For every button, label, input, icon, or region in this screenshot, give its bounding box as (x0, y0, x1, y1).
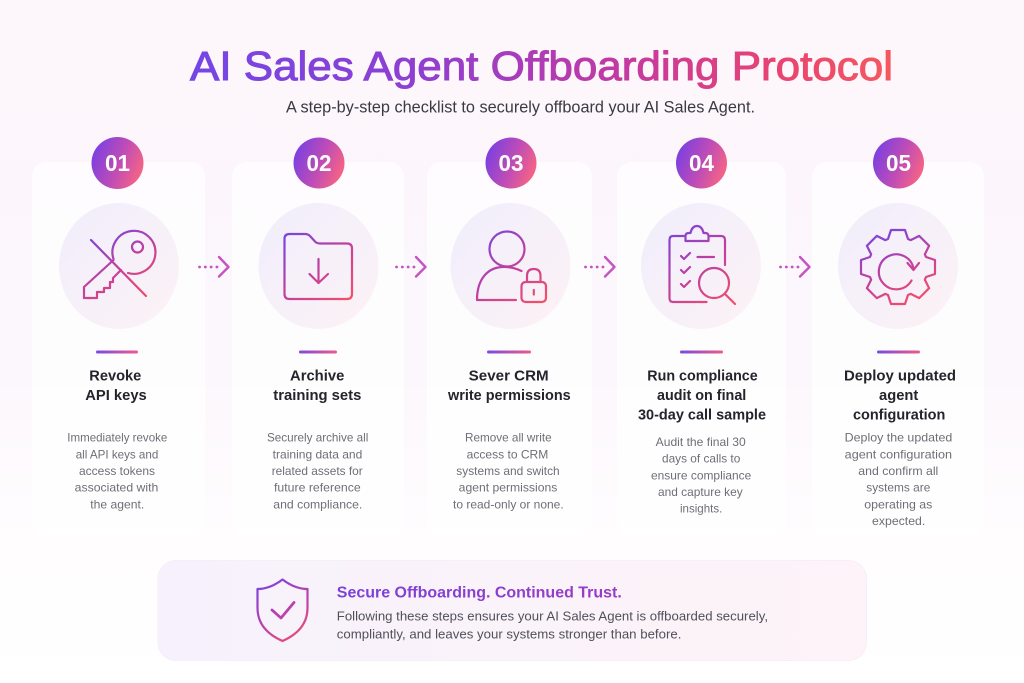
step description: and confirm all (858, 464, 938, 478)
step description: associated with (75, 481, 158, 495)
number badge 03 (486, 138, 536, 188)
accent bar (299, 350, 337, 354)
step description: training data and (273, 447, 362, 461)
number badge 02 (294, 138, 344, 188)
title: AI Sales Agent Offboarding Protocol (190, 43, 893, 89)
card background (812, 162, 984, 537)
step description: systems and switch (456, 464, 560, 478)
number badge 03: 03 (498, 150, 524, 176)
card background (427, 162, 592, 537)
accent bar (487, 350, 531, 354)
arrow 1 to 2 (200, 257, 228, 276)
step description: Immediately revoke (67, 431, 168, 445)
icon: revoked key (84, 231, 155, 298)
step title: audit on final (657, 387, 746, 404)
step description: agent configuration (845, 447, 952, 461)
step title: Run compliance (647, 368, 758, 385)
step title: Deploy updated (844, 368, 956, 385)
step description (651, 435, 752, 516)
step description: agent permissions (459, 481, 557, 495)
accent bar (680, 350, 723, 354)
card background (32, 162, 205, 537)
step description: Deploy the updated (845, 431, 952, 445)
step description: expected. (872, 514, 925, 528)
step title (447, 368, 571, 404)
arrow 4 to 5 (780, 257, 810, 276)
arrow 3 to 4 (586, 257, 614, 276)
accent bar (96, 350, 138, 354)
callout background (158, 560, 866, 660)
panel: step 1 (32, 137, 205, 537)
icon circle (450, 203, 570, 329)
step title: write permissions (447, 387, 571, 404)
step title: Revoke (89, 368, 141, 385)
step description: Remove all write (465, 431, 552, 445)
step description: access tokens (79, 464, 155, 478)
number badge 04 (676, 138, 727, 188)
number badge 01 (92, 137, 144, 189)
panel: step 2 (232, 138, 404, 537)
step description: ensure compliance (651, 468, 752, 482)
step description: to read-only or none. (453, 497, 564, 511)
number badge 01: 01 (105, 150, 130, 176)
number badge 05 (873, 138, 924, 188)
step description: access to CRM (467, 447, 548, 461)
step description: systems are (866, 481, 931, 495)
step description: and capture key (658, 485, 743, 499)
step description (453, 431, 564, 511)
icon: folder with download arrow (284, 234, 352, 299)
step description: all API keys and (76, 447, 158, 461)
step description: Securely archive all (267, 431, 368, 445)
number badge 05: 05 (886, 150, 911, 176)
panel: step 3 (427, 138, 592, 537)
step title (273, 368, 361, 404)
callout text: Following these steps ensures your AI Sales Agent is offboarded securely, (337, 609, 768, 624)
number badge 04: 04 (689, 150, 714, 176)
step title: Archive (290, 368, 344, 385)
step title (844, 368, 956, 424)
step title: training sets (273, 387, 361, 404)
step description: Audit the final 30 (656, 435, 746, 449)
step title: API keys (85, 387, 147, 404)
icon circle (59, 203, 179, 329)
accent bar (877, 350, 920, 354)
step description: operating as (864, 497, 932, 511)
arrow 2 to 3 (396, 257, 426, 276)
step title: agent (879, 387, 918, 404)
panel: step 4 (617, 138, 786, 537)
step description: and compliance. (273, 497, 362, 511)
icon: clipboard checklist with magnifier (670, 226, 735, 304)
step title: 30-day call sample (638, 406, 766, 424)
icon: user with padlock (477, 232, 546, 302)
icon: shield with check (258, 580, 308, 641)
icon circle (838, 203, 958, 329)
step description (67, 431, 168, 511)
icon circle (258, 203, 378, 329)
icon: gear with refresh arrow (861, 230, 935, 304)
step title (638, 368, 766, 424)
step description: days of calls to (662, 452, 741, 466)
step title: Sever CRM (469, 368, 549, 385)
step description: insights. (680, 502, 722, 516)
subtitle: A step-by-step checklist to securely offboard your AI Sales Agent. (286, 98, 755, 116)
step description: related assets for (272, 464, 363, 478)
step description (845, 431, 952, 528)
step description: the agent. (90, 497, 144, 511)
step title (85, 368, 147, 404)
callout text (337, 609, 768, 641)
card background (232, 162, 404, 537)
step description: future reference (274, 481, 361, 495)
number badge 02: 02 (306, 150, 332, 176)
step title: configuration (853, 406, 945, 424)
card background (617, 162, 786, 537)
panel: closing callout (158, 560, 866, 660)
panel: step 5 (812, 138, 984, 537)
icon circle (641, 203, 761, 329)
callout heading: Secure Offboarding. Continued Trust. (337, 584, 622, 601)
step description (267, 431, 368, 511)
callout text: compliantly, and leaves your systems stronger than before. (337, 626, 681, 641)
